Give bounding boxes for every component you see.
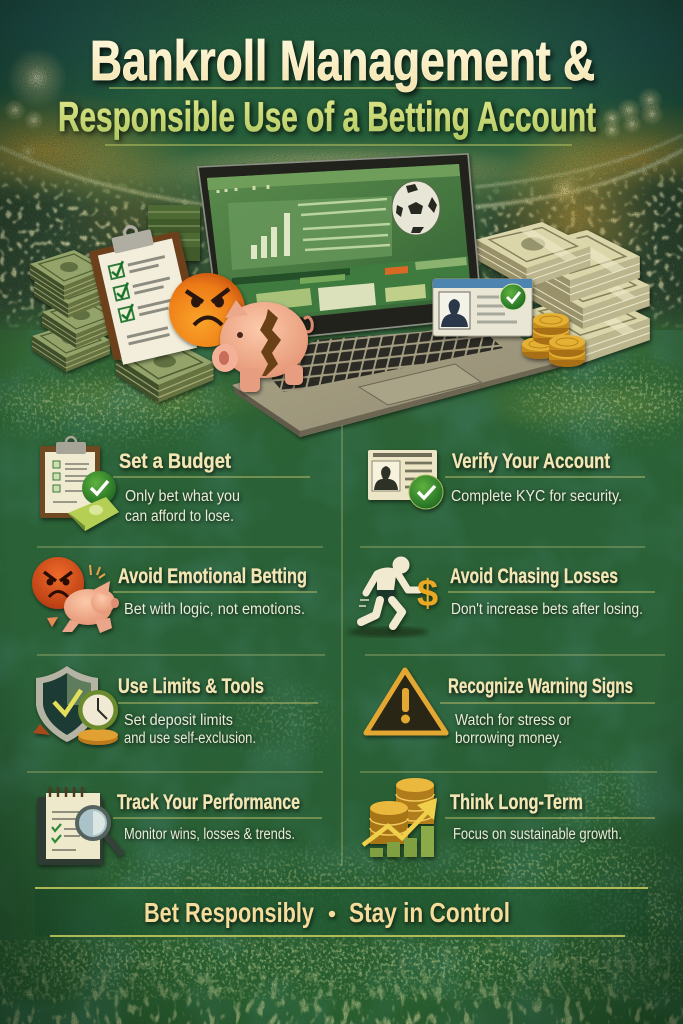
- icon: ID card with check: [368, 450, 443, 509]
- hero: left cash stacks: [30, 205, 214, 402]
- hero: broken piggy bank: [212, 300, 312, 392]
- icon: shield with clock and coin: [33, 666, 118, 745]
- footer banner: Bet Responsibly: [144, 897, 314, 928]
- heading: Set a Budget: [119, 450, 231, 473]
- heading: Verify Your Account: [452, 450, 610, 473]
- hero: clipboard checklist: [85, 216, 205, 367]
- text block: [455, 712, 571, 747]
- panel: avoid emotional betting: [32, 557, 317, 633]
- text block: Don't increase bets after losing.: [451, 601, 643, 618]
- icon: warning triangle: [366, 670, 446, 733]
- hero: gold coins: [522, 313, 585, 367]
- hero: laptop: [198, 154, 560, 437]
- text block: Focus on sustainable growth.: [453, 826, 622, 843]
- icon: angry face and pig: [32, 557, 119, 633]
- panel: recognize warning signs: [366, 670, 655, 747]
- icon: notepad and magnifier: [37, 787, 122, 865]
- hero: soccer ball: [392, 181, 440, 235]
- icon: runner chasing dollar: [348, 556, 438, 637]
- icon: coins, bars and arrow: [363, 778, 437, 857]
- text block: Watch for stress or: [455, 712, 571, 729]
- heading: Avoid Chasing Losses: [450, 565, 618, 588]
- heading: Use Limits & Tools: [118, 675, 264, 698]
- text block: Monitor wins, losses & trends.: [124, 826, 295, 843]
- text block: [124, 712, 256, 747]
- text block: Only bet what you: [125, 488, 240, 505]
- text block: Complete KYC for security.: [451, 488, 622, 505]
- panel: use limits and tools: [33, 666, 318, 747]
- footer banner: Stay in Control: [349, 897, 510, 928]
- crowd: [0, 150, 683, 330]
- footer banner: [35, 888, 648, 936]
- text block: Bet with logic, not emotions.: [124, 601, 305, 618]
- heading: Avoid Emotional Betting: [118, 565, 307, 588]
- panel: set a budget: [40, 437, 310, 531]
- panel: avoid chasing losses: [348, 556, 655, 637]
- hero: ID card with check: [433, 279, 532, 336]
- text block: can afford to lose.: [125, 508, 234, 525]
- hero illustration: [30, 154, 650, 437]
- heading: Think Long-Term: [450, 791, 583, 814]
- text block: and use self-exclusion.: [124, 730, 256, 747]
- panel: verify your account: [368, 450, 645, 509]
- icon: clipboard with check and cash: [40, 437, 119, 531]
- heading: Track Your Performance: [117, 791, 300, 814]
- text block: Set deposit limits: [124, 712, 233, 729]
- text block: [125, 488, 240, 525]
- hero: right cash stacks: [476, 222, 650, 364]
- text block: borrowing money.: [455, 730, 562, 747]
- icon: runner chasing dollar: $: [417, 573, 438, 615]
- panel: think long-term: [363, 778, 655, 857]
- panel: track your performance: [37, 787, 322, 865]
- hero: angry face: [169, 273, 245, 347]
